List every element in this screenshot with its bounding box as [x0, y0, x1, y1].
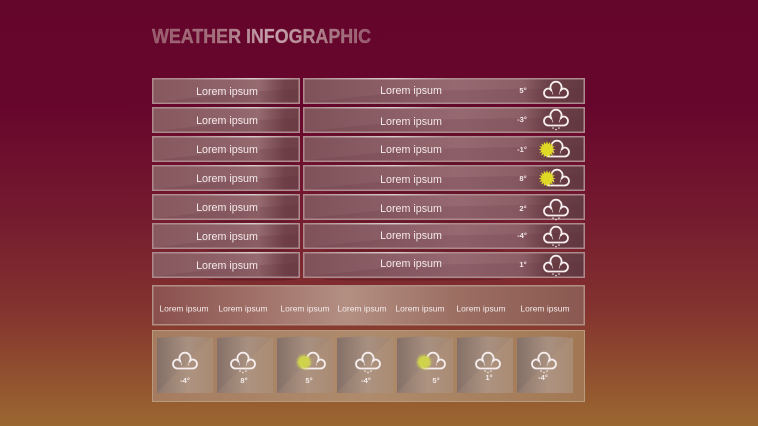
row: left 4: Lorem ipsum: [196, 173, 258, 185]
row: forecast 6, snow -4 degrees: Lorem ipsum: [380, 230, 442, 242]
row: left 3: [153, 136, 300, 164]
card: day 2: 8°: [240, 376, 248, 385]
panel: label strip: Lorem ipsum: [456, 304, 506, 314]
row: forecast 2, snow -3 degrees: -3°: [517, 115, 527, 124]
card: day 3: [277, 336, 333, 393]
card: day 4: [337, 336, 393, 393]
row: left 6: Lorem ipsum: [196, 231, 258, 243]
card: day 4: -4°: [361, 376, 371, 385]
row: forecast 2, snow -3 degrees: [303, 107, 584, 136]
title: WEATHER INFOGRAPHIC: [152, 25, 371, 48]
panel: left list: [153, 78, 300, 280]
panel: label strip: Lorem ipsum: [218, 304, 268, 314]
card: day 5: 5°: [432, 376, 440, 385]
row: forecast 3, sun and cloud -1 degrees: [303, 136, 584, 164]
row: left 2: Lorem ipsum: [196, 115, 258, 127]
card: day 1: [157, 336, 213, 393]
row: forecast 1, cloud 5 degrees: Lorem ipsum: [380, 85, 442, 97]
row: forecast 2, snow -3 degrees: Lorem ipsum: [380, 116, 442, 128]
row: forecast 1, cloud 5 degrees: 5°: [519, 86, 527, 95]
row: left 3: Lorem ipsum: [196, 144, 258, 156]
panel: label strip: Lorem ipsum: [395, 304, 445, 314]
panel: label strip: Lorem ipsum: [520, 304, 570, 314]
card: day 2: [217, 336, 273, 393]
row: forecast 3, sun and cloud -1 degrees: Lorem ipsum: [380, 144, 442, 156]
panel: right forecast list: [303, 78, 584, 280]
row: forecast 5, snow 2 degrees: [303, 194, 584, 222]
row: forecast 5, snow 2 degrees: Lorem ipsum: [380, 203, 442, 215]
card: day 6: 1°: [485, 373, 493, 382]
row: left 1: Lorem ipsum: [196, 86, 258, 98]
row: forecast 6, snow -4 degrees: [303, 223, 584, 252]
card: day 3: 5°: [305, 376, 313, 385]
row: left 4: [153, 165, 300, 194]
row: forecast 7, snow 1 degree: 1°: [519, 260, 527, 269]
card: day 7: [517, 336, 573, 393]
row: forecast 4, sun and cloud 8 degrees: Lorem ipsum: [380, 174, 442, 186]
row: left 6: [153, 223, 300, 252]
row: left 7: [153, 252, 300, 280]
row: forecast 7, snow 1 degree: [303, 252, 584, 280]
row: left 7: Lorem ipsum: [196, 260, 258, 272]
card: day 7: -4°: [538, 373, 548, 382]
row: forecast 4, sun and cloud 8 degrees: 8°: [519, 174, 527, 183]
row: forecast 7, snow 1 degree: Lorem ipsum: [380, 258, 442, 270]
card: day 6: [457, 336, 513, 393]
row: left 5: Lorem ipsum: [196, 202, 258, 214]
row: left 2: [153, 107, 300, 136]
row: forecast 4, sun and cloud 8 degrees: [303, 165, 584, 194]
row: left 5: [153, 194, 300, 222]
row: forecast 5, snow 2 degrees: 2°: [519, 204, 527, 213]
row: forecast 1, cloud 5 degrees: [303, 78, 584, 106]
card: day 1: -4°: [180, 376, 190, 385]
panel: label strip: Lorem ipsum: [280, 304, 330, 314]
panel: label strip: Lorem ipsum: [159, 304, 209, 314]
row: forecast 3, sun and cloud -1 degrees: -1°: [517, 145, 527, 154]
panel: daily cards: [152, 330, 584, 402]
card: day 5: [397, 336, 453, 393]
row: forecast 6, snow -4 degrees: -4°: [517, 231, 527, 240]
row: left 1: [153, 78, 300, 106]
panel: label strip: [153, 286, 584, 325]
panel: label strip: Lorem ipsum: [337, 304, 387, 314]
